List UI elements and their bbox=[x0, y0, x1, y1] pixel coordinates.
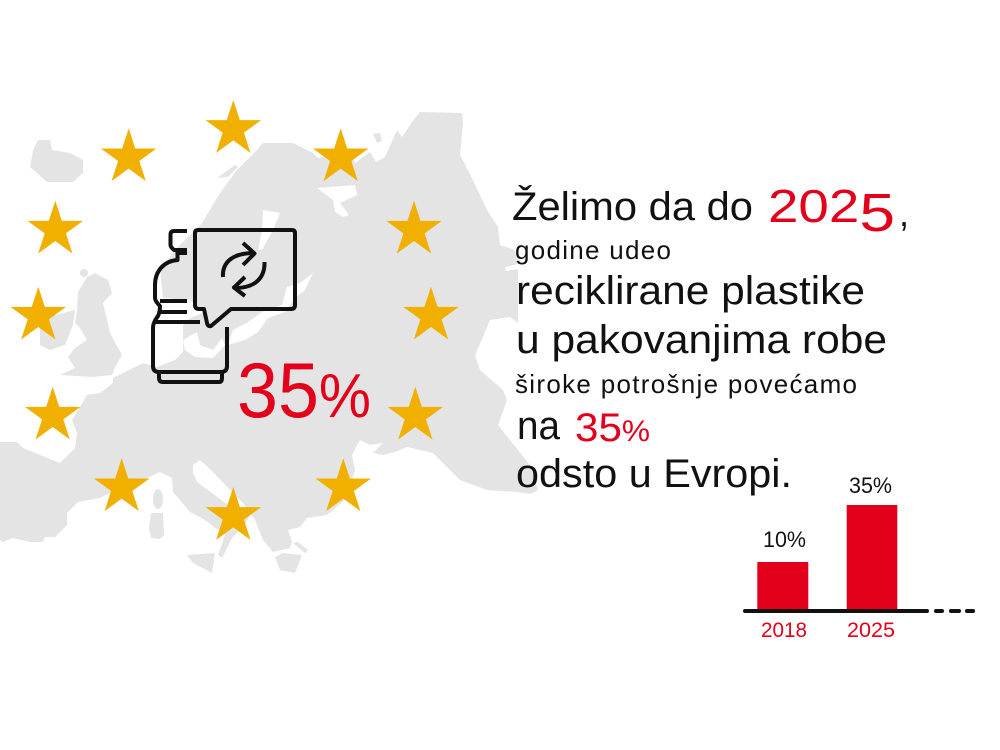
EU star circle bbox=[11, 100, 459, 540]
year label 2018: 2018 bbox=[761, 619, 807, 642]
map of Europe bbox=[0, 112, 538, 573]
headline text block bbox=[512, 180, 909, 496]
headline line: Želimo da do 2025: 5 bbox=[859, 182, 895, 243]
bar 2025 bbox=[847, 505, 897, 610]
line: reciklirane plastike: reciklirane plastike bbox=[516, 269, 865, 313]
line: na 35%: 35% bbox=[575, 406, 650, 450]
chart axis bbox=[745, 609, 973, 613]
value label 35%: 35% bbox=[849, 473, 892, 498]
value label 10%: 10% bbox=[763, 527, 806, 552]
line: odsto u Evropi: odsto u Evropi. bbox=[516, 452, 792, 496]
headline line: Želimo da do 2025 bbox=[512, 180, 909, 243]
line: široke potrošnje povećamo: široke potrošnje povećamo bbox=[515, 369, 857, 399]
icon: plastic bottle with recycling speech bubble bbox=[153, 230, 295, 382]
line: na 35%: na bbox=[517, 404, 561, 448]
headline line: Želimo da do 2025: , bbox=[899, 193, 909, 234]
big 35% figure: 35% bbox=[237, 346, 371, 434]
headline line: Želimo da do 2025: 202 bbox=[768, 180, 859, 232]
line: u pakovanjima robe: u pakovanjima robe bbox=[516, 318, 887, 362]
year label 2025: 2025 bbox=[847, 619, 895, 642]
bar 2018 bbox=[757, 562, 808, 610]
bar chart bbox=[745, 473, 973, 642]
line: na 35% bbox=[517, 404, 650, 450]
headline line: Želimo da do 2025: Želimo da do bbox=[512, 184, 753, 229]
line: godine udeo: godine udeo bbox=[515, 235, 671, 265]
